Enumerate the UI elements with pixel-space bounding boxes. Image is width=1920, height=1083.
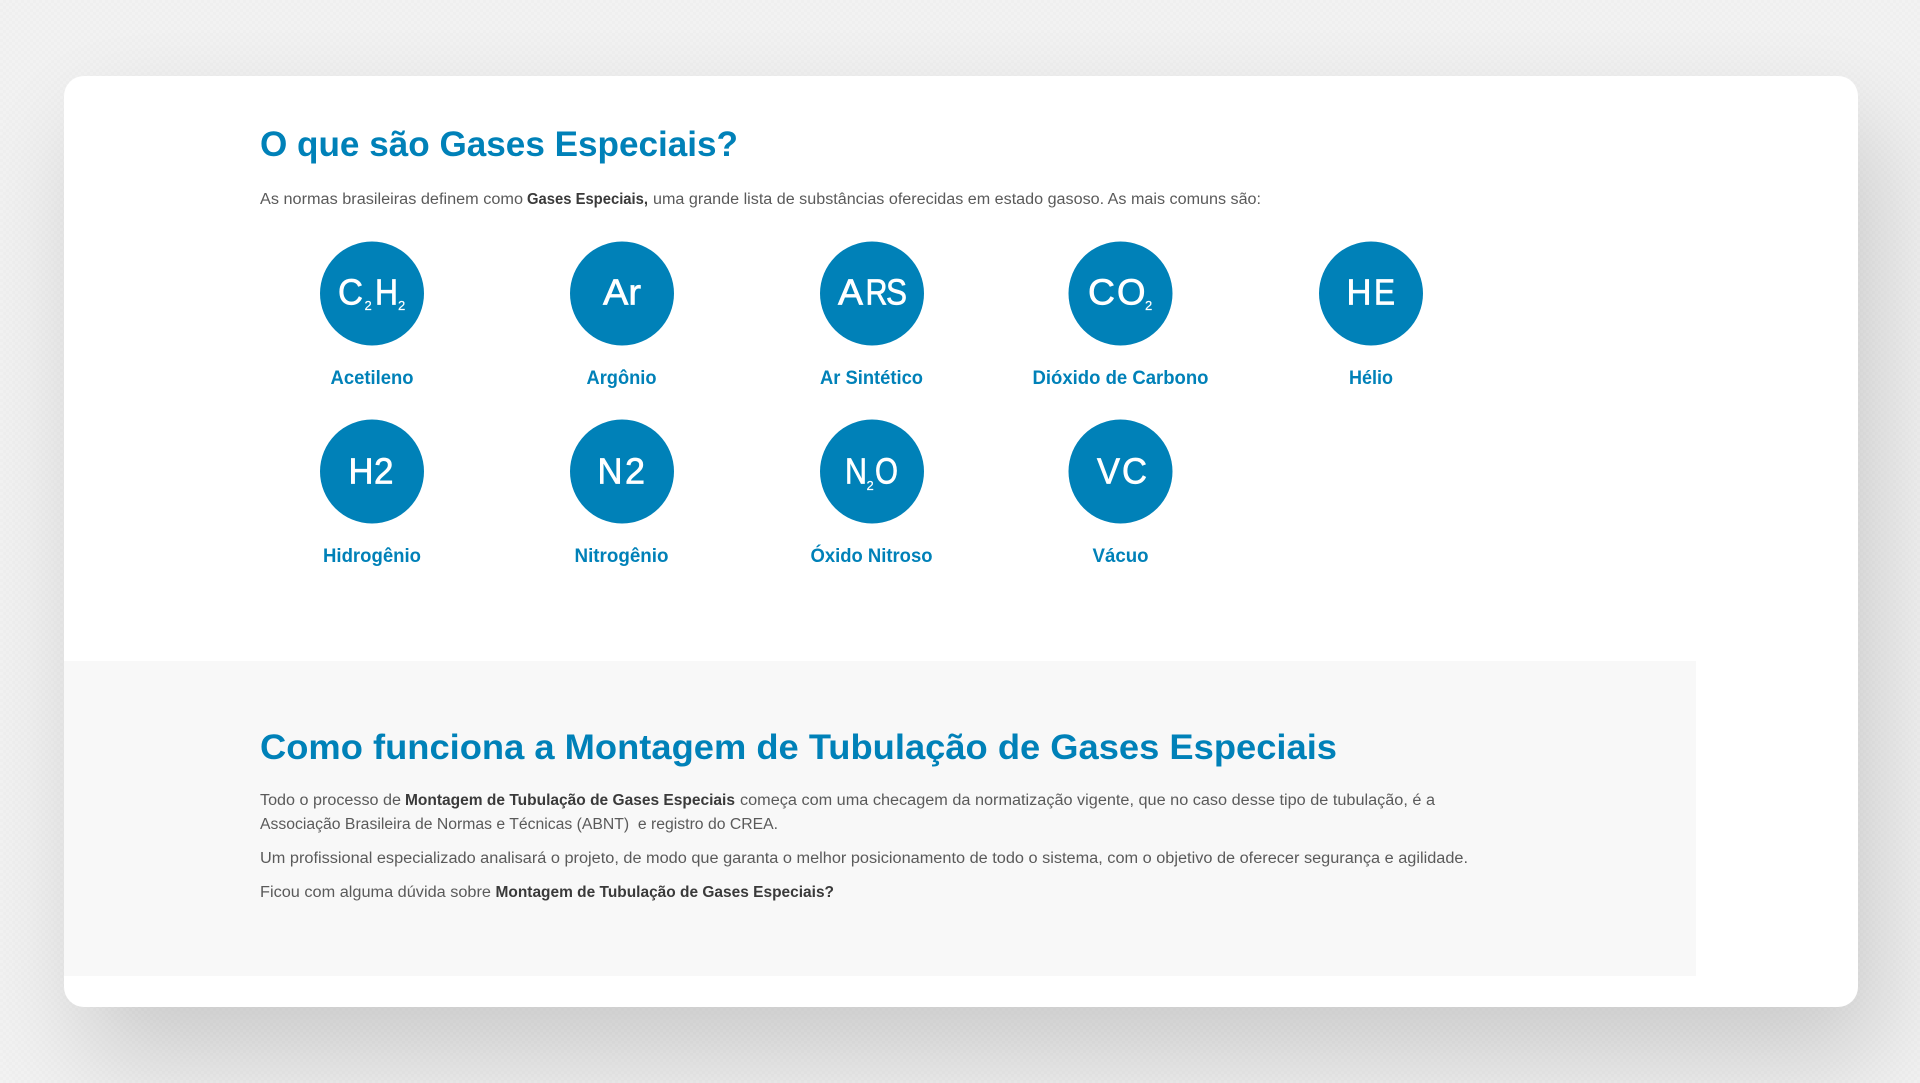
gas: Argônio: Ar — [603, 272, 641, 312]
gas: Acetileno: Acetileno — [330, 368, 414, 389]
gas: Vácuo: V — [1097, 450, 1120, 492]
gas: Hélio: H — [1346, 272, 1372, 312]
gas: Dióxido de Carbono: O — [1117, 272, 1146, 312]
body text: Ficou com alguma dúvida sobre — [260, 884, 491, 901]
gas: Argônio: Argônio — [586, 368, 656, 389]
panel: what are special gases — [260, 125, 1423, 567]
gas: Óxido Nitroso: O — [875, 450, 898, 492]
gas: Nitrogênio — [570, 420, 674, 567]
body text: Todo o processo de — [260, 792, 401, 809]
body text: Montagem de Tubulação de Gases Especiais? — [496, 884, 834, 901]
gas: Óxido Nitroso: Óxido Nitroso — [810, 545, 932, 567]
gas: Hidrogênio: H — [348, 450, 374, 492]
gas: Hidrogênio — [320, 420, 424, 567]
heading: Como funciona: Como funciona a Montagem de Tubulação de Gases Especiais — [260, 728, 1337, 767]
gas: Nitrogênio: Nitrogênio — [574, 546, 668, 567]
intro text: As normas brasileiras definem como — [260, 191, 523, 208]
panel: how it works — [64, 661, 1696, 976]
gas: Argônio — [570, 242, 674, 389]
gas: Óxido Nitroso: N — [845, 450, 867, 492]
gas: Dióxido de Carbono: C — [1088, 272, 1115, 312]
gas: Acetileno: 2 — [398, 298, 405, 313]
gas: Nitrogênio: 2 — [625, 450, 645, 492]
gas: Dióxido de Carbono: Dióxido de Carbono — [1032, 368, 1208, 389]
intro text: Gases Especiais, — [527, 191, 648, 208]
gas: Hélio: E — [1374, 272, 1395, 312]
gas: Dióxido de Carbono: 2 — [1145, 298, 1152, 313]
gas: Acetileno — [320, 242, 424, 389]
gas: Acetileno: C — [338, 272, 363, 312]
gas: Hélio: Hélio — [1349, 368, 1393, 389]
body text: começa com uma checagem da normatização vigente, que no caso desse tipo de tubulação, é a — [740, 792, 1435, 809]
gas: Hélio — [1319, 242, 1423, 389]
intro text — [260, 191, 1261, 208]
intro text: uma grande lista de substâncias oferecidas em estado gasoso. As mais comuns são: — [653, 191, 1261, 208]
gas: Nitrogênio: N — [598, 450, 622, 492]
gas: Acetileno: H — [375, 272, 398, 312]
gas: Ar Sintético: A — [838, 272, 863, 312]
gas: Ar Sintético: S — [886, 272, 907, 312]
gas: Vácuo: C — [1122, 450, 1147, 492]
gas: Ar Sintético: Ar Sintético — [820, 368, 923, 389]
gas: Óxido Nitroso — [810, 420, 932, 567]
gas: Ar Sintético: R — [866, 272, 888, 312]
gas: Hidrogênio: 2 — [374, 450, 394, 492]
body text: Montagem de Tubulação de Gases Especiais — [405, 792, 735, 809]
gas: Vácuo — [1068, 420, 1172, 567]
body text: Associação Brasileira de Normas e Técnicas (ABNT) e registro do CREA. — [260, 816, 778, 833]
heading: O que são Gases Especiais: O que são Gases Especiais? — [260, 125, 738, 164]
gas: Ar Sintético — [820, 242, 924, 389]
gas: Óxido Nitroso: 2 — [866, 478, 874, 493]
gas: Dióxido de Carbono — [1032, 242, 1208, 389]
grey panel background — [64, 661, 1696, 976]
body text: Um profissional especializado analisará o projeto, de modo que garanta o melhor posicionamento de todo o sistema, com o objetivo de oferecer segurança e agilidade. — [260, 850, 1468, 867]
gas: Vácuo: Vácuo — [1092, 546, 1148, 567]
gas: Acetileno: 2 — [364, 298, 372, 313]
body text — [260, 792, 1468, 901]
gas: Hidrogênio: Hidrogênio — [323, 546, 421, 567]
